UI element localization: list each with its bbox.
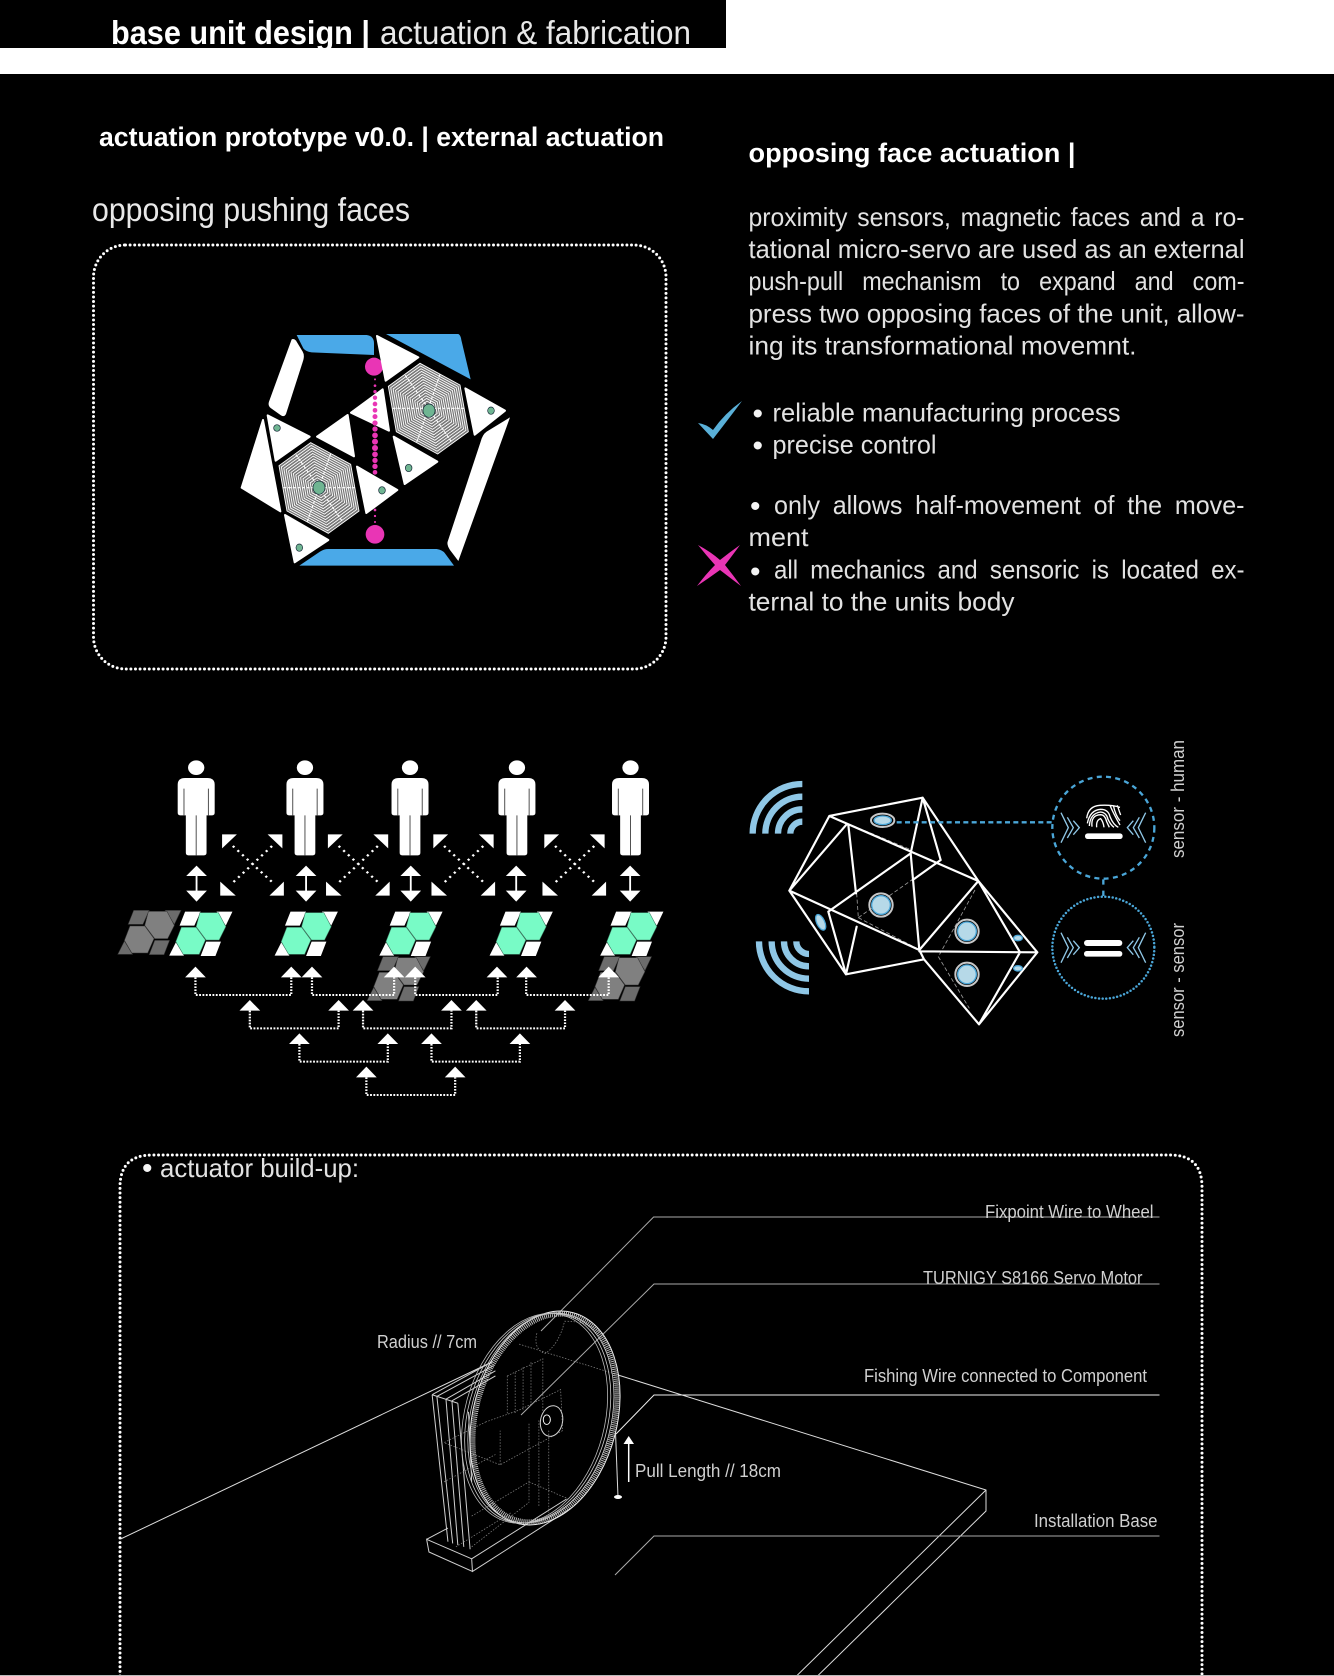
people and units network diagram: [118, 760, 663, 1095]
label: pull length: Pull Length // 18cm: [635, 1461, 781, 1481]
icon: wireless waves bottom: [759, 941, 809, 991]
icon: fingerprint: [1087, 805, 1121, 827]
description paragraph: [748, 202, 1244, 360]
circle: sensor-human: [1052, 777, 1154, 879]
label: installation base: Installation Base: [1034, 1511, 1158, 1531]
vertical double arrows: [186, 866, 640, 902]
header title: [0, 0, 1334, 74]
sensor discs: [814, 814, 1022, 986]
green units: [169, 912, 663, 956]
label: fishing wire: Fishing Wire connected to Component: [864, 1366, 1147, 1386]
label: sensor - sensor: sensor - sensor: [1168, 923, 1188, 1037]
panel: prototype diagram frame: [94, 245, 666, 669]
lower white triangles: [285, 388, 505, 562]
pink end magnets: [365, 358, 384, 544]
cons list: •: [750, 490, 761, 523]
actuator stand and motor: [427, 1321, 618, 1571]
installation table outline: [121, 1362, 986, 1676]
sensor spiral hexagons: [279, 363, 468, 533]
label: radius: Radius // 7cm: [377, 1332, 477, 1352]
pros list: •: [752, 430, 763, 462]
subheading: opposing pushing faces: opposing pushing faces: [92, 191, 410, 228]
heading: actuator build-up: •: [142, 1152, 153, 1185]
wheel: [439, 1292, 643, 1543]
cons list: all mechanics and sensoric is located ex-: [774, 554, 1244, 584]
label: fixpoint wire: Fixpoint Wire to Wheel: [985, 1202, 1154, 1222]
gray inactive units: [118, 910, 652, 1001]
base block: [427, 1499, 571, 1571]
hexagonal unit diagram: [242, 334, 510, 566]
section heading: opposing face actuation: opposing face actuation |: [748, 138, 1076, 168]
pros list: reliable manufacturing process: [772, 398, 1120, 428]
pros list: precise control: [772, 430, 936, 460]
people icons: [178, 760, 649, 855]
pull length arrow: [614, 1432, 634, 1499]
green sensor dots: [274, 404, 494, 551]
polyhedron wireframe: [789, 798, 1037, 1024]
panel: actuator build-up frame: [120, 1155, 1202, 1676]
label: servo motor: TURNIGY S8166 Servo Motor: [923, 1268, 1142, 1288]
crossing dotted arrows: [220, 834, 606, 896]
connector between circles: [1100, 879, 1107, 897]
motor and bracket hidden lines: [444, 1321, 618, 1547]
pros list: •: [752, 398, 763, 430]
description paragraph: tational micro-servo are used as an external: [748, 234, 1244, 264]
description paragraph: push-pull mechanism to expand and com-: [748, 266, 1244, 296]
description paragraph: ing its transformational movemnt.: [748, 330, 1136, 360]
blue faces: [297, 334, 471, 566]
heading: actuation prototype: actuation prototype v0.0. | external actuation: [99, 122, 664, 152]
circle: sensor-sensor: [1052, 897, 1154, 999]
upper white triangles: [242, 336, 418, 511]
sensor polyhedron diagram: [753, 777, 1154, 1024]
icon: cross mark: [697, 545, 741, 586]
heading: actuator build-up: actuator build-up:: [160, 1153, 359, 1183]
description paragraph: press two opposing faces of the unit, allow-: [748, 298, 1244, 328]
cons list: •: [750, 556, 761, 588]
header title: base unit design |: [111, 14, 370, 51]
servo hub: [538, 1404, 565, 1438]
header title: actuation & fabrication: [380, 14, 691, 51]
pink dotted actuation line: [372, 378, 378, 523]
white side bars: [269, 339, 510, 561]
cons list: only allows half-movement of the move-: [774, 490, 1244, 520]
icon: wireless waves top: [753, 784, 802, 834]
stand fins: [432, 1362, 495, 1549]
pros list: [752, 398, 1120, 462]
cons list: ment: [748, 522, 809, 552]
dotted bracket tree: [195, 977, 609, 1095]
tree arrowheads: [185, 967, 619, 1077]
description paragraph: proximity sensors, magnetic faces and a ro-: [748, 202, 1244, 232]
callout leader lines: [521, 1217, 1160, 1575]
label: sensor - human: sensor - human: [1168, 740, 1188, 858]
dashed sensor link: [897, 819, 1052, 826]
icon: check mark: [698, 401, 742, 439]
cons list: ternal to the units body: [748, 586, 1014, 616]
cons list: [748, 490, 1244, 616]
